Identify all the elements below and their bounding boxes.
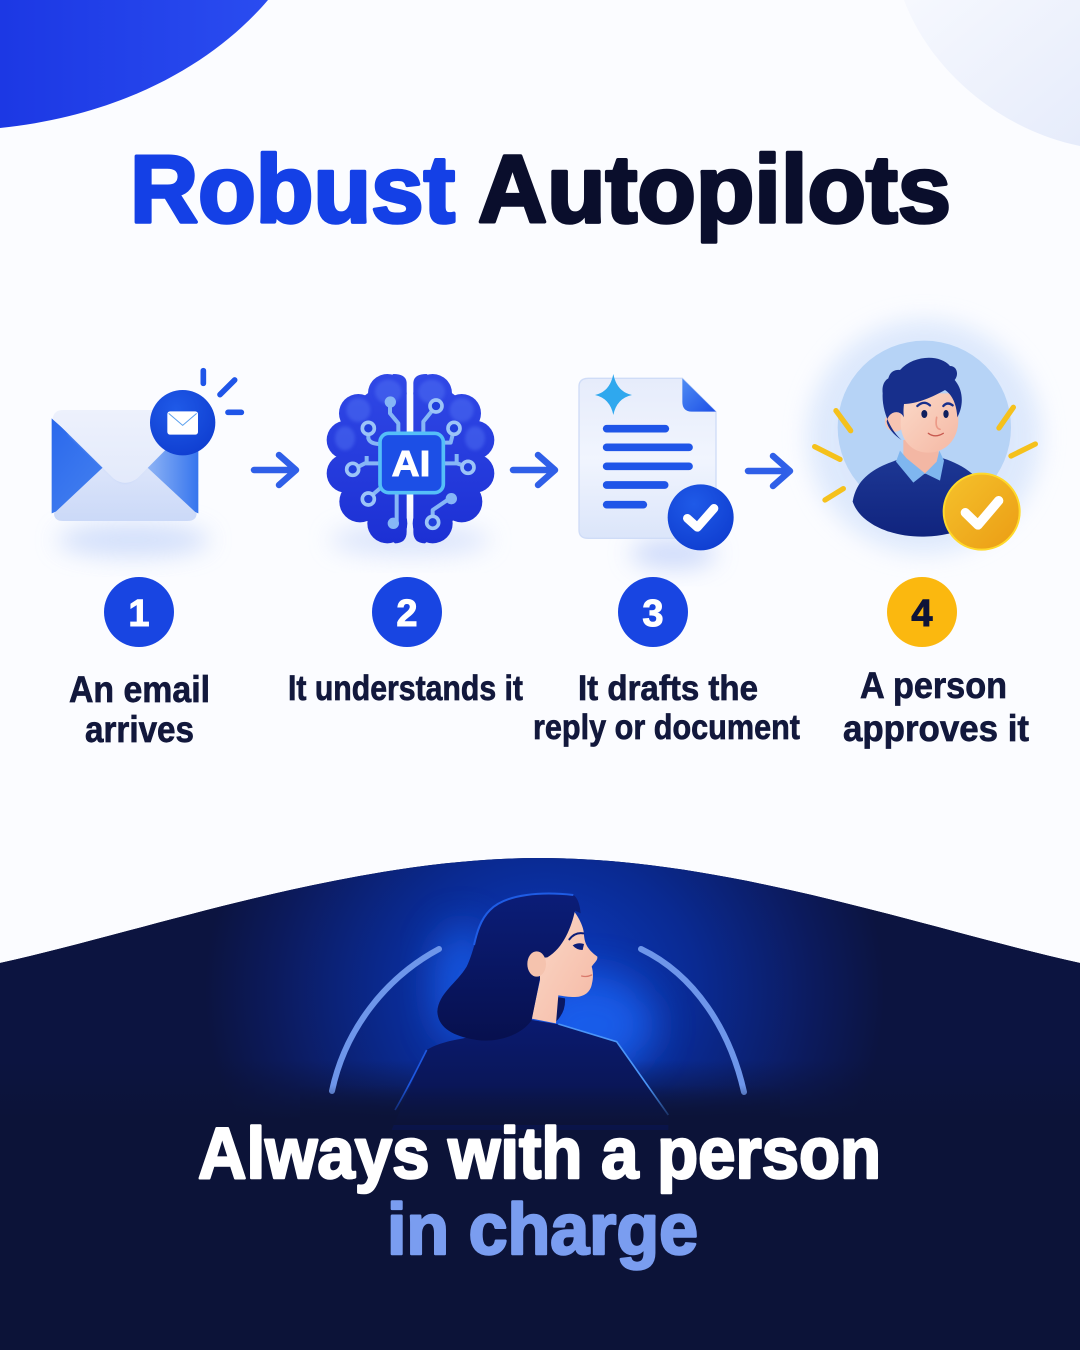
corner shape: top left blue: [0, 0, 268, 128]
arrow: step 3 to 4: [748, 456, 790, 486]
arcs around woman: [332, 949, 744, 1092]
icon: AI brain: [327, 374, 494, 555]
body: [853, 458, 990, 537]
step 2 number: 2: [396, 593, 418, 635]
step 1 label: [69, 669, 210, 750]
icon: approving person: [808, 320, 1041, 553]
illustration: woman in profile: [392, 894, 668, 1130]
step 1 number: [104, 577, 174, 647]
headline: Always with a person in charge: in charge: [387, 1190, 698, 1270]
step 3 number: [618, 577, 688, 647]
step 3 label: reply or document: [533, 708, 800, 747]
step 4 label: [843, 665, 1029, 749]
bottom fade under figure: [300, 1085, 780, 1125]
step 3 label: It drafts the: [578, 669, 758, 708]
arrow: step 2 to 3: [513, 455, 555, 485]
step 3 number: 3: [642, 593, 664, 635]
headline: Always with a person in charge: Always with a person: [198, 1114, 881, 1194]
panel: dark footer: [0, 858, 1080, 1350]
step 2 number: [372, 577, 442, 647]
title: Robust: [130, 136, 455, 243]
step 4 number: [887, 577, 957, 647]
step 3 label: [533, 669, 800, 747]
title: Autopilots: [478, 136, 951, 243]
icon: email with notification badge: [52, 371, 241, 557]
step 1 number: 1: [128, 593, 150, 635]
step 1 label: arrives: [85, 709, 194, 750]
icon: AI brain: AI: [392, 443, 430, 484]
corner shape: top right light: [904, 0, 1080, 146]
step 4 number: 4: [911, 593, 933, 635]
headline: Always with a person in charge: [198, 1114, 881, 1270]
step 4 label: approves it: [843, 708, 1029, 749]
icon: drafted document: [579, 374, 734, 568]
step 4 label: A person: [860, 665, 1007, 706]
step 2 label: It understands it: [288, 669, 523, 708]
title: [130, 136, 951, 243]
step 1 label: An email: [69, 669, 210, 710]
arrow: step 1 to 2: [254, 455, 296, 485]
